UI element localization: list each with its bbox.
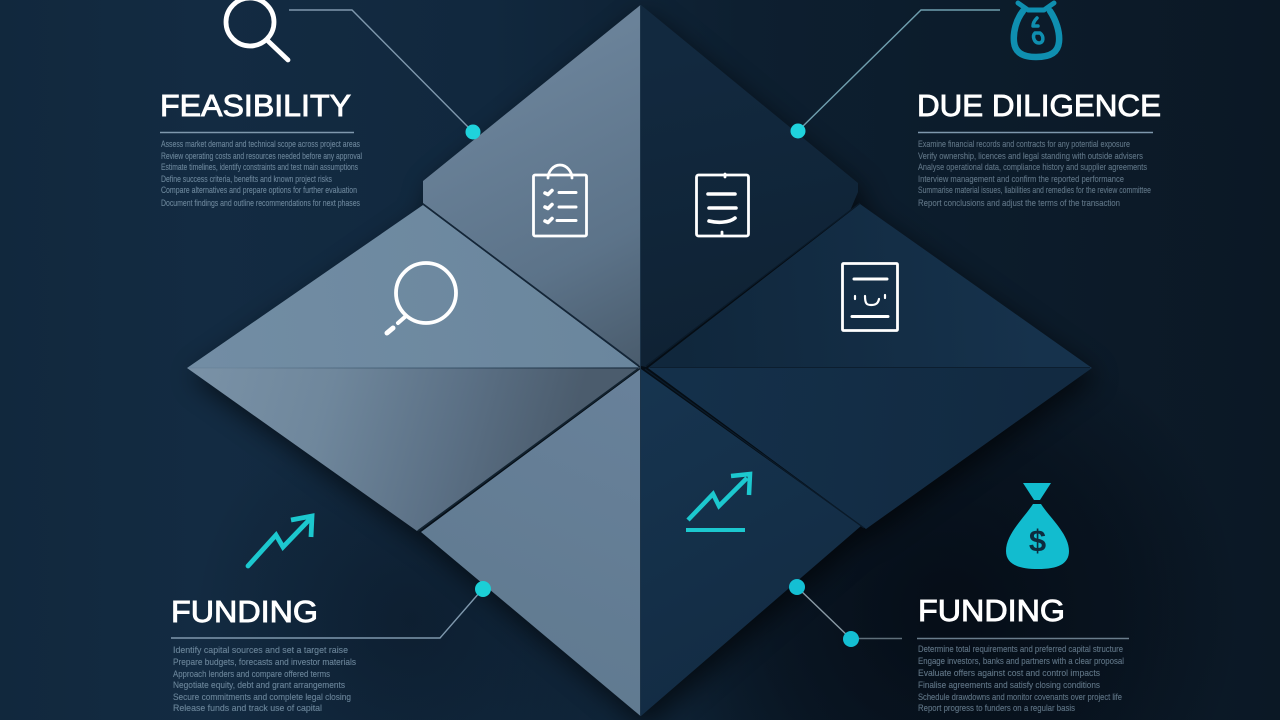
text block: funding right: Schedule drawdowns and monitor covenants over project life [918, 692, 1122, 702]
icon: center clipboard checklist [534, 165, 586, 236]
icon: magnifier [226, 0, 288, 60]
panel: upper right top segment [641, 5, 858, 367]
text block: funding left: Approach lenders and compare offered terms [173, 669, 330, 679]
heading: due diligence: DUE DILIGENCE [917, 88, 1161, 123]
text block: feasibility: Assess market demand and technical scope across project areas [161, 139, 360, 149]
panel: lower right segment [648, 368, 1092, 529]
text block: funding right: Determine total requirements and preferred capital structure [918, 644, 1123, 654]
text block: due diligence: Interview management and confirm the reported performance [918, 174, 1124, 184]
text block: funding left: Identify capital sources and set a target raise [173, 645, 348, 655]
connector: funding right [789, 579, 902, 647]
text block: funding right: Evaluate offers against cost and control impacts [918, 668, 1100, 678]
text block: due diligence: Report conclusions and adjust the terms of the transaction [918, 198, 1120, 208]
text block: due diligence: Summarise material issues, liabilities and remedies for the review committee [918, 185, 1151, 195]
text block: feasibility: Document findings and outline recommendations for next phases [161, 198, 360, 208]
icon: filled money bag: $ [1029, 523, 1046, 558]
icon: center magnifier [387, 263, 456, 333]
text block: feasibility: Estimate timelines, identify constraints and test main assumptions [161, 162, 358, 172]
text block: funding left: Negotiate equity, debt and grant arrangements [173, 680, 345, 690]
diamond diagram [187, 5, 1097, 720]
text block: due diligence: Analyse operational data, compliance history and supplier agreements [918, 162, 1147, 172]
icon: teal growth arrow [248, 516, 312, 566]
connector: due diligence [790, 10, 1000, 138]
panel: upper right segment [648, 204, 1092, 368]
icon: outlined money bag [1014, 3, 1059, 57]
text block: funding left: Secure commitments and complete legal closing [173, 692, 351, 702]
panel: upper left segment [187, 205, 640, 368]
block: feasibility [160, 0, 480, 208]
heading: feasibility: FEASIBILITY [160, 88, 351, 123]
text block: funding left [173, 645, 356, 713]
text block: feasibility: Review operating costs and resources needed before any approval [161, 151, 362, 161]
text block: funding right [918, 644, 1124, 713]
text block: feasibility: Compare alternatives and prepare options for further evaluation [161, 185, 357, 195]
block: funding right [789, 483, 1129, 713]
heading: funding left: FUNDING [171, 594, 318, 629]
text block: feasibility [161, 139, 362, 208]
panel: upper left top segment [423, 5, 640, 367]
text block: funding left: Release funds and track use of capital [173, 703, 322, 713]
panel: bottom left segment [421, 369, 640, 716]
text block: due diligence: Verify ownership, licences and legal standing with outside advisers [918, 151, 1143, 161]
icon: center clipboard lines [696, 174, 748, 236]
text block: funding right: Finalise agreements and satisfy closing conditions [918, 680, 1100, 690]
text block: feasibility: Define success criteria, benefits and known project risks [161, 174, 332, 184]
panel: lower left segment [187, 368, 640, 531]
block: due diligence [790, 3, 1161, 208]
icon: filled money bag [1006, 483, 1069, 569]
icon: document with smile [842, 264, 898, 330]
icon: center teal growth arrow [686, 474, 750, 530]
connector: funding left [171, 581, 491, 638]
text block: due diligence [918, 139, 1151, 208]
panel: bottom right segment [641, 369, 861, 716]
text block: funding right: Engage investors, banks and partners with a clear proposal [918, 656, 1124, 666]
block: funding left [171, 516, 491, 713]
text block: funding left: Prepare budgets, forecasts and investor materials [173, 657, 356, 667]
text block: funding right: Report progress to funders on a regular basis [918, 703, 1075, 713]
heading: funding right: FUNDING [918, 593, 1065, 628]
text block: due diligence: Examine financial records and contracts for any potential exposure [918, 139, 1130, 149]
connector: feasibility [289, 10, 480, 140]
